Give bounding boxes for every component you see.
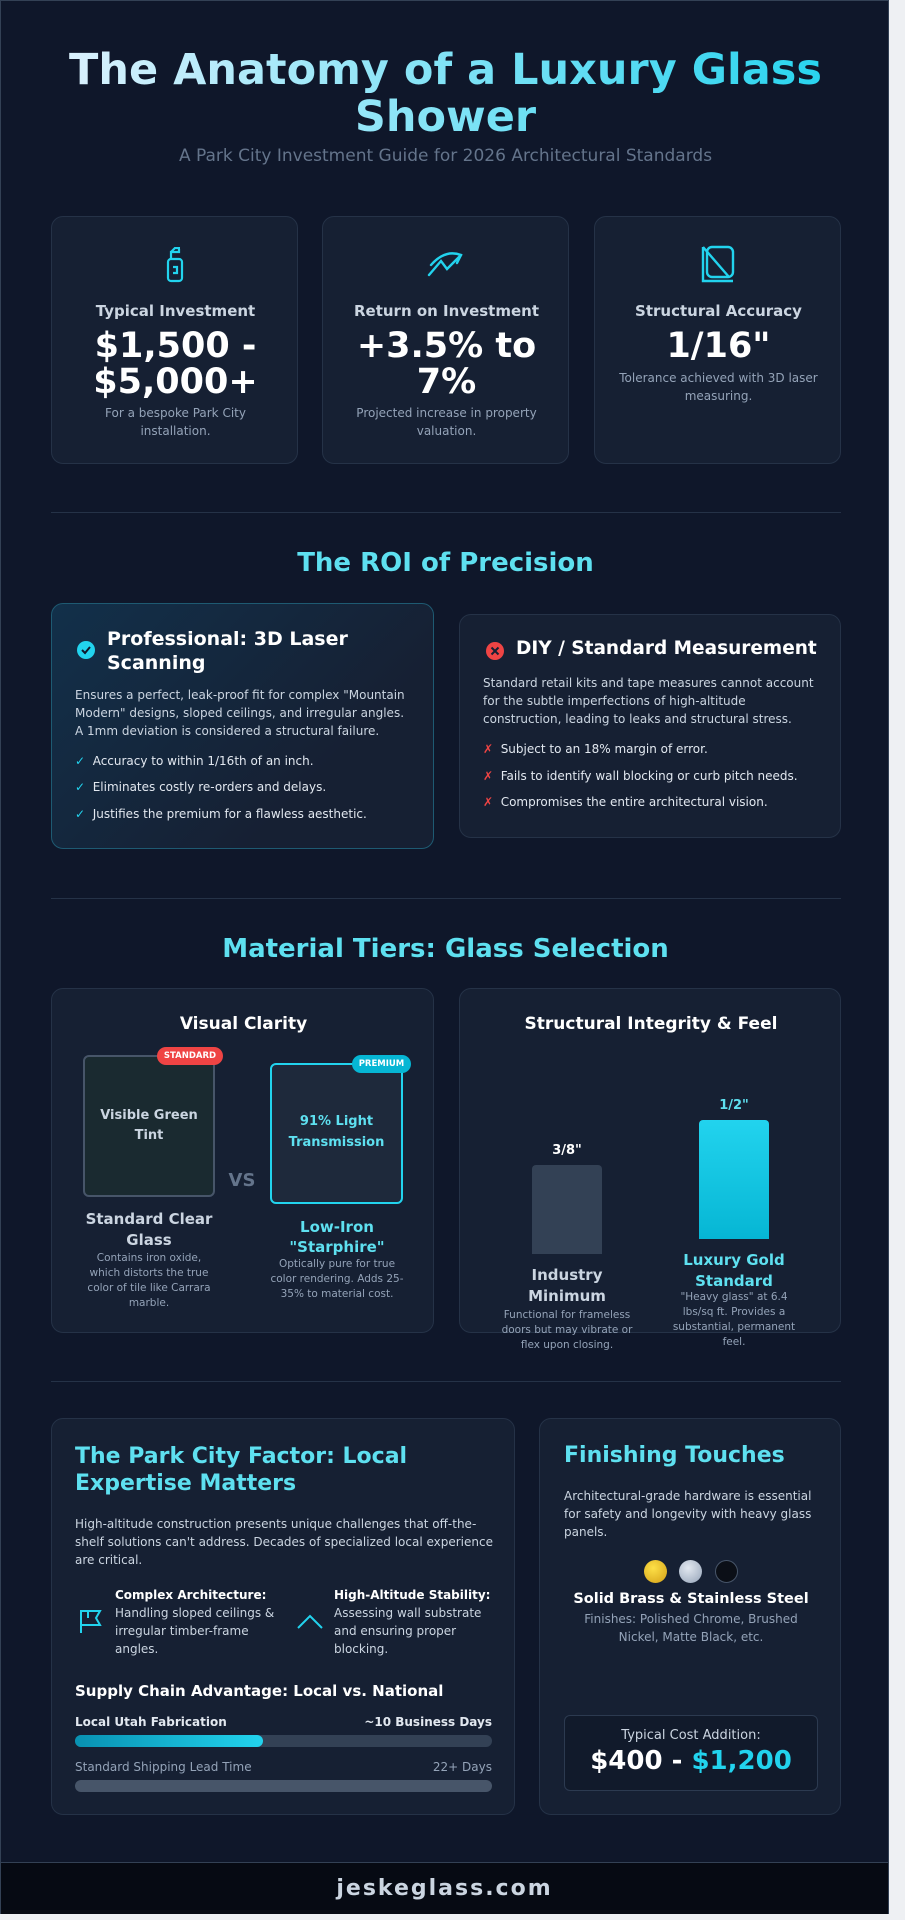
stat card: ROI — [322, 216, 569, 464]
heading: Finishing Touches — [564, 1443, 785, 1468]
icon: trend — [428, 252, 463, 276]
cost box — [564, 1715, 818, 1791]
description: Ensures a perfect, leak-proof fit for complex "Mountain Modern" designs, sloped ceilings, and irregular angles. A 1mm deviation is considered a structural failure. — [75, 688, 405, 738]
stat card: investment — [51, 216, 298, 464]
finish swatches — [644, 1560, 738, 1583]
finish label: Solid Brass & Stainless Steel — [573, 1591, 809, 1607]
badge: standard: STANDARD — [164, 1051, 216, 1061]
progress bar: standard — [75, 1760, 492, 1792]
subtitle: A Park City Investment Guide for 2026 Architectural Standards — [179, 146, 712, 166]
label: low-iron: Optically pure for true color rendering. Adds 25-35% to material cost. — [270, 1258, 404, 1300]
panel: finishing touches — [539, 1418, 841, 1815]
footer — [1, 1862, 888, 1914]
x list: ✗ Compromises the entire architectural vision. — [483, 795, 768, 809]
description: Standard retail kits and tape measures cannot account for the subtle imperfections of high-altitude construction, leading to leaks and structural stress. — [483, 676, 814, 726]
badge: premium: PREMIUM — [359, 1059, 404, 1069]
description: Projected increase in property valuation. — [356, 406, 537, 438]
panel: visual clarity — [51, 988, 434, 1333]
bar: luxury gold standard: Luxury Gold — [683, 1251, 785, 1269]
panel: professional — [51, 603, 434, 849]
title: The Anatomy of a Luxury Glass Shower — [69, 45, 822, 142]
checklist: ✓ Eliminates costly re-orders and delays. — [75, 780, 326, 794]
progress bar: local: ~10 Business Days — [364, 1715, 492, 1729]
checklist: ✓ Accuracy to within 1/16th of an inch. — [75, 754, 314, 768]
panel: park city factor — [51, 1418, 515, 1815]
checklist: ✓ Justifies the premium for a flawless aesthetic. — [75, 807, 367, 821]
label: low-iron — [270, 1218, 404, 1300]
icon: check circle — [77, 641, 95, 659]
bar: luxury gold standard: Standard — [695, 1272, 773, 1290]
icon: flag — [80, 1610, 102, 1633]
x list: ✗ Subject to an 18% margin of error. — [483, 742, 708, 756]
label: low-iron: Low-Iron — [300, 1218, 374, 1236]
footer: jeskeglass.com — [336, 1876, 553, 1901]
panel: DIY — [459, 614, 841, 838]
finish list: Finishes: Polished Chrome, Brushed Nickel, Matte Black, etc. — [584, 1612, 798, 1644]
vs label: VS — [229, 1170, 255, 1191]
value: +3.5% to — [357, 326, 536, 366]
progress bar: standard: Standard Shipping Lead Time — [75, 1760, 252, 1774]
badge: premium — [352, 1055, 411, 1073]
section heading: material tiers: Material Tiers: Glass Selection — [222, 934, 669, 964]
bar: industry minimum — [502, 1143, 632, 1351]
glass sample: premium: 91% Light — [300, 1114, 373, 1129]
subheading: supply chain: Supply Chain Advantage: Local vs. National — [75, 1682, 443, 1700]
progress bar: standard: 22+ Days — [433, 1760, 492, 1774]
x list: ✗ Fails to identify wall blocking or curb pitch needs. — [483, 769, 798, 783]
description: For a bespoke Park City installation. — [105, 406, 246, 438]
description: Architectural-grade hardware is essential for safety and longevity with heavy glass panels. — [564, 1489, 811, 1539]
label: standard clear glass: Glass — [126, 1231, 172, 1249]
heading: The Park City Factor: Local Expertise Matters — [75, 1444, 407, 1496]
value — [357, 326, 536, 402]
stat card: accuracy — [594, 216, 841, 464]
label: standard clear glass: Contains iron oxide, which distorts the true color of tile like Carrara marble. — [87, 1252, 211, 1309]
bar: industry minimum: Minimum — [528, 1287, 606, 1305]
label: Typical Investment — [96, 302, 255, 320]
description: High-altitude construction presents unique challenges that off-the-shelf solutions can't address. Decades of specialized local experience are critical. — [75, 1517, 493, 1567]
label: standard clear glass — [86, 1210, 212, 1309]
bar: luxury gold standard — [673, 1098, 795, 1348]
feature: high-altitude stability: High-Altitude Stability: Assessing wall substrate and ensuring proper blocking. — [334, 1588, 490, 1656]
bar: industry minimum: 3/8" — [552, 1143, 582, 1158]
value: $1,500 - — [95, 326, 256, 366]
heading: DIY / Standard Measurement — [516, 638, 817, 659]
bar: industry minimum: Industry — [532, 1266, 602, 1284]
glass sample: premium — [270, 1063, 403, 1204]
label: Return on Investment — [354, 302, 539, 320]
icon: spray bottle — [166, 247, 184, 282]
heading: Professional: 3D Laser Scanning — [107, 628, 348, 674]
x list — [483, 742, 798, 809]
icon: x circle — [486, 642, 504, 660]
badge: standard — [157, 1047, 223, 1065]
bar: luxury gold standard: "Heavy glass" at 6.4 lbs/sq ft. Provides a substantial, permanent feel. — [673, 1291, 795, 1348]
progress bar: local — [75, 1715, 492, 1747]
label: low-iron: "Starphire" — [289, 1238, 385, 1256]
value: $5,000+ — [93, 362, 258, 402]
feature: complex architecture: Complex Architecture: Handling sloped ceilings & irregular timber-frame angles. — [115, 1588, 274, 1656]
heading: Visual Clarity — [180, 1014, 307, 1034]
label: Structural Accuracy — [635, 302, 802, 320]
value: 1/16" — [666, 326, 771, 366]
value — [93, 326, 258, 402]
heading: Structural Integrity & Feel — [525, 1014, 777, 1034]
description: Tolerance achieved with 3D laser measuring. — [619, 371, 818, 403]
cost box: $400 - $1,200 — [590, 1746, 792, 1776]
glass sample: standard: Visible Green — [100, 1108, 198, 1123]
value: 7% — [417, 362, 476, 402]
panel: structural integrity — [459, 988, 841, 1333]
icon: peak — [297, 1614, 323, 1629]
icon: tablet — [702, 246, 734, 282]
bar: luxury gold standard: 1/2" — [719, 1098, 749, 1113]
bar: industry minimum: Functional for frameless doors but may vibrate or flex upon closing. — [502, 1309, 632, 1351]
glass sample: premium: Transmission — [289, 1135, 384, 1150]
section heading: ROI: The ROI of Precision — [297, 548, 594, 578]
checklist — [75, 754, 367, 821]
label: standard clear glass: Standard Clear — [86, 1210, 212, 1228]
glass sample: standard — [83, 1055, 215, 1197]
glass sample: standard: Tint — [135, 1128, 163, 1143]
progress bar: local: Local Utah Fabrication — [75, 1715, 227, 1729]
cost box: Typical Cost Addition: — [621, 1728, 761, 1743]
